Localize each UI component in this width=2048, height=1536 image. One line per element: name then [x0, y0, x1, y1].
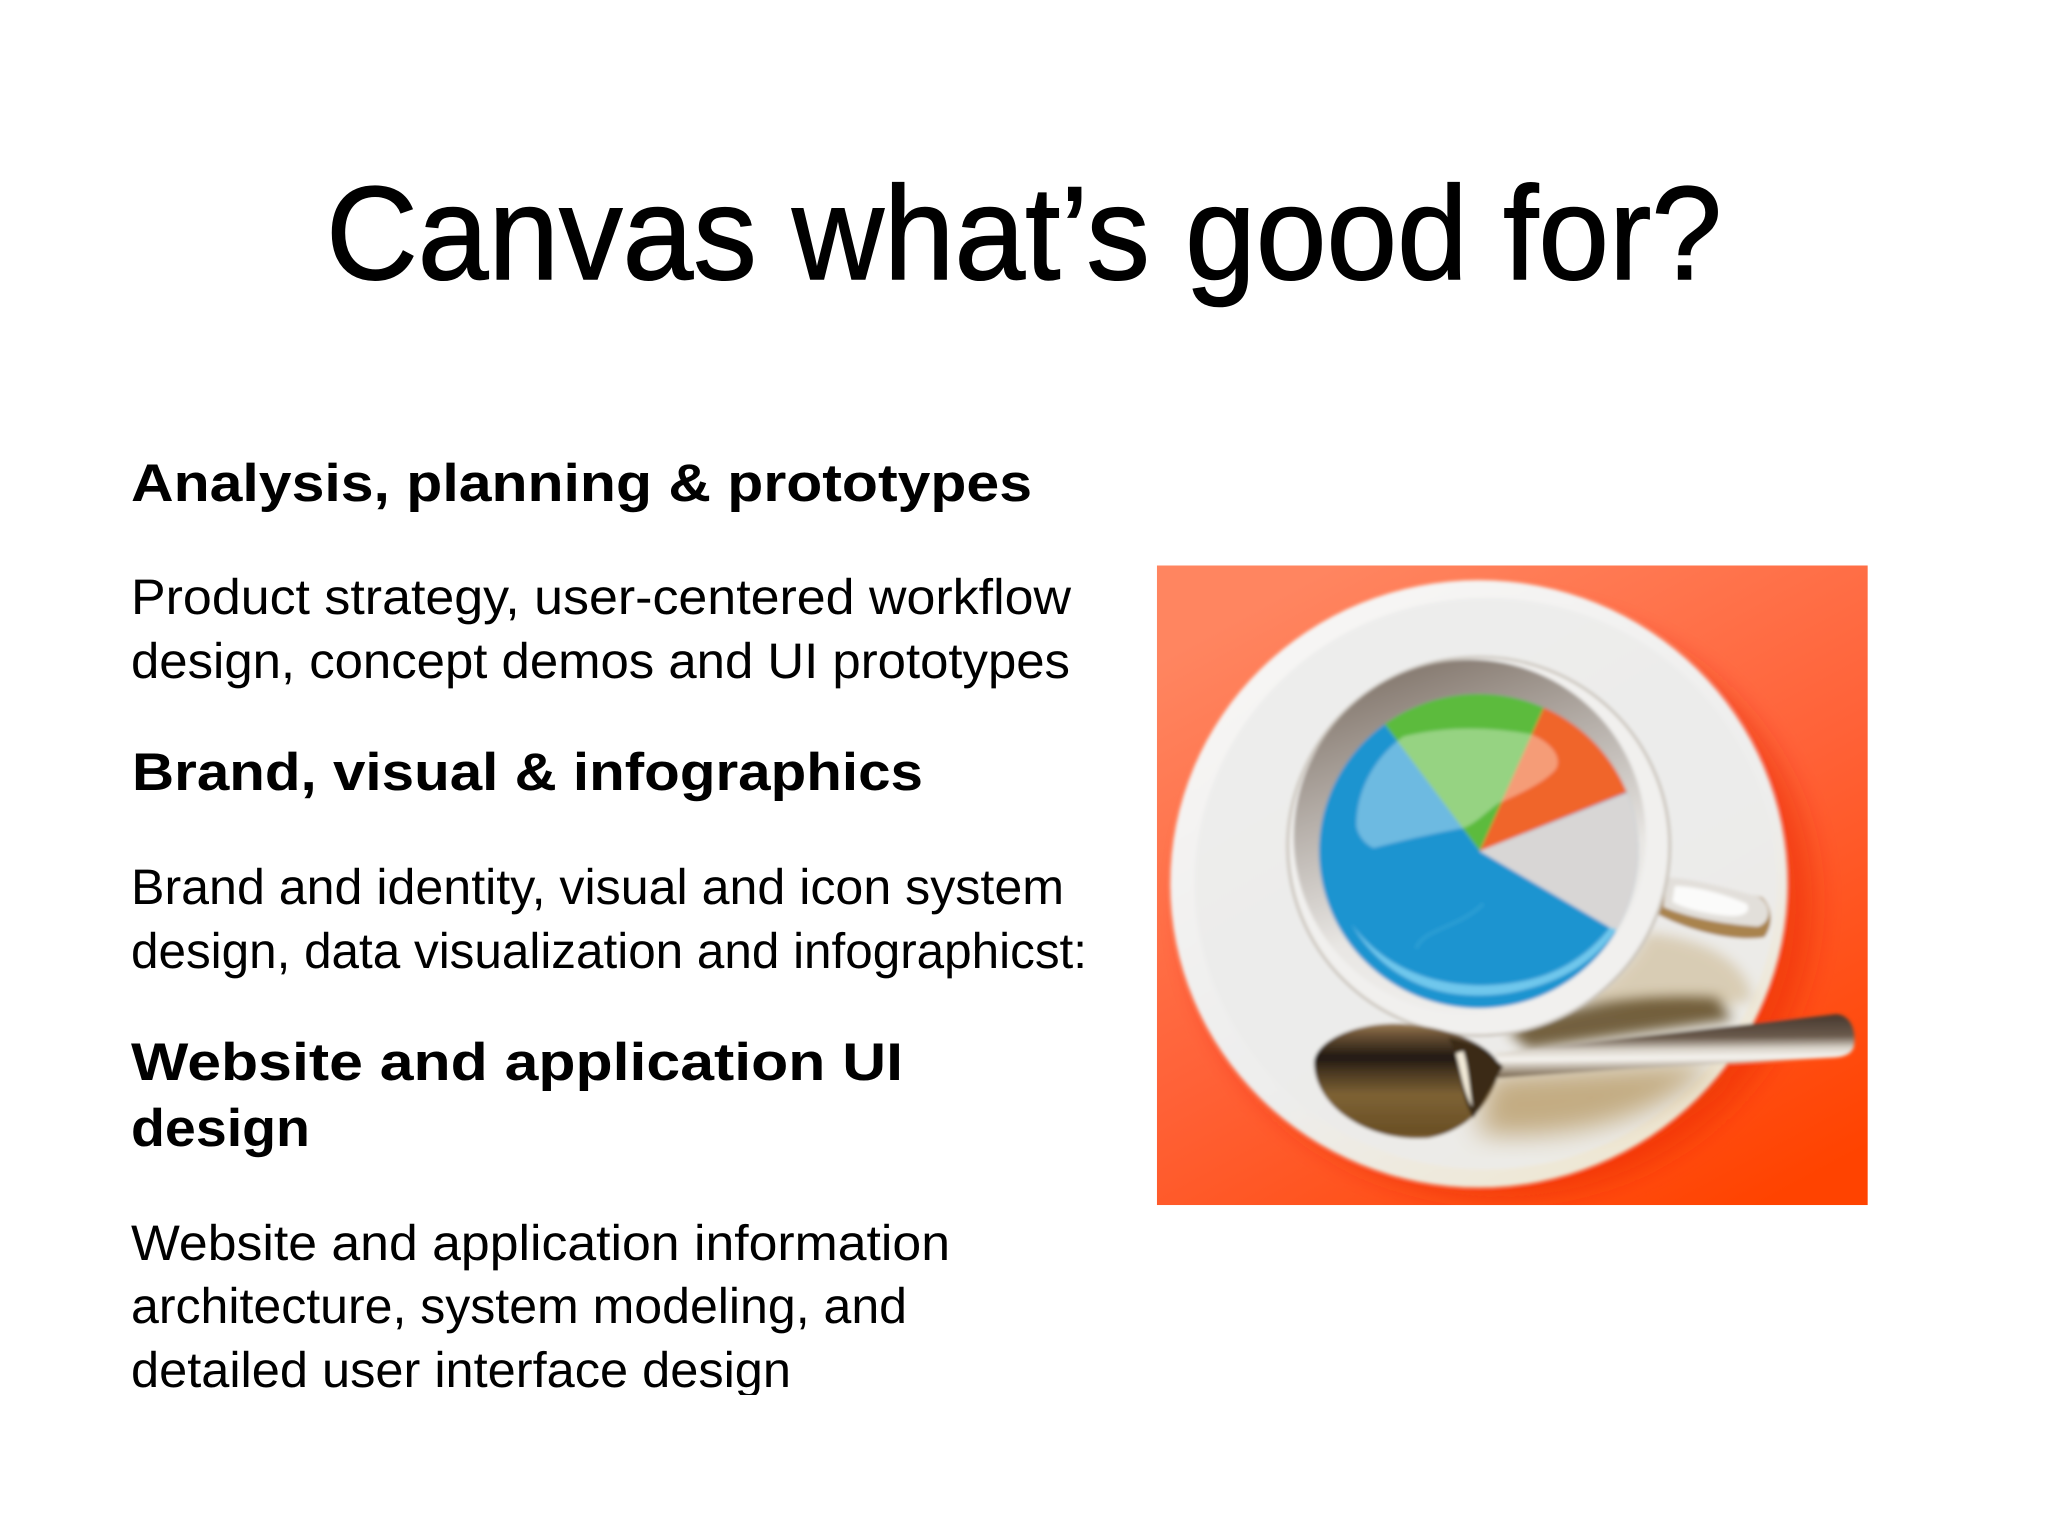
slice: grey	[1478, 791, 1640, 932]
steam reflection	[1416, 904, 1483, 948]
text column: capabilities	[131, 454, 1087, 1398]
spoon shadow on saucer	[1478, 1062, 1712, 1135]
cup inner wall	[1292, 657, 1646, 966]
slice: orange	[1477, 706, 1628, 854]
body: analysis: design, concept demos and UI prototypes	[131, 633, 1070, 689]
saucer	[1170, 580, 1787, 1187]
body: brand: design, data visualization and infographicst:	[131, 923, 1087, 979]
heading: brand: Brand, visual & infographics	[132, 743, 923, 802]
pie chart coffee	[1314, 683, 1647, 1013]
body: website	[131, 1215, 950, 1398]
heading: website: Website and application UI	[131, 1033, 903, 1092]
spoon	[1309, 1014, 1854, 1145]
body: analysis: Product strategy, user-centered workflow	[131, 569, 1072, 625]
body: website: Website and application information	[131, 1215, 950, 1271]
cup rim	[1288, 657, 1670, 1036]
bottom rim reflection	[1351, 924, 1617, 995]
cup handle	[1655, 877, 1771, 938]
body: website: architecture, system modeling, and	[131, 1278, 907, 1334]
body: website: detailed user interface design	[131, 1342, 791, 1398]
heading: website: design	[131, 1099, 310, 1158]
cup shadow on saucer	[1578, 933, 1752, 1010]
title: Canvas what’s good for?	[326, 160, 1722, 308]
photo: coffee cup with pie chart	[1157, 565, 1868, 1205]
dark shadow above spoon handle	[1508, 997, 1732, 1049]
shadow on the table	[1187, 605, 1814, 1198]
glare on surface	[1356, 729, 1558, 848]
heading: analysis: Analysis, planning & prototypes	[131, 454, 1032, 513]
slice: green	[1383, 691, 1546, 852]
body: brand: Brand and identity, visual and icon system	[131, 859, 1064, 915]
saucer inner well	[1272, 611, 1768, 1168]
heading: website	[131, 1033, 903, 1158]
body: brand	[131, 859, 1087, 979]
body: analysis	[131, 569, 1072, 689]
